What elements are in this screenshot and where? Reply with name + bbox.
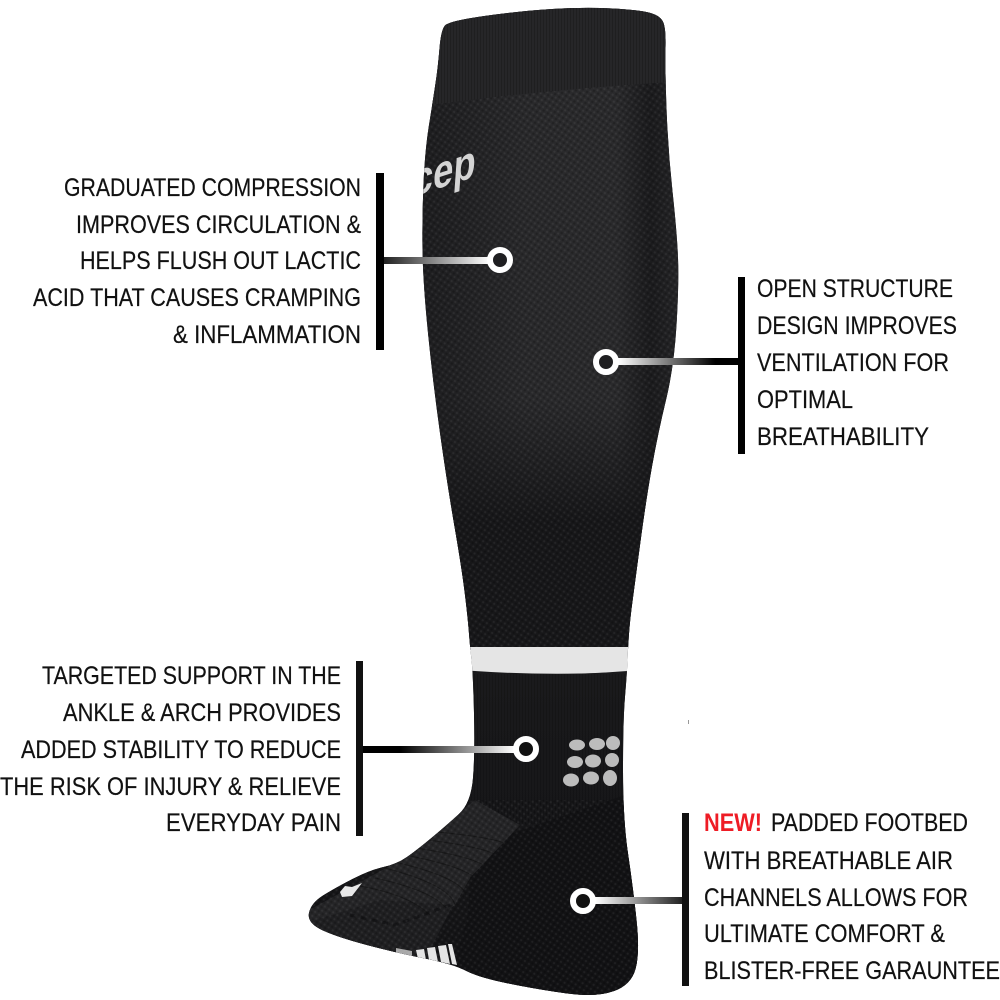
text block: DESIGN IMPROVES [757,312,957,340]
text block: THE RISK OF INJURY & RELIEVE [0,773,341,801]
text block: OPEN STRUCTURE [757,275,953,303]
toe mark [340,883,362,897]
forefoot [300,800,520,950]
text block: WITH BREATHABLE AIR [704,847,953,875]
sock photo [300,0,700,1000]
marker [490,250,510,270]
text block: & INFLAMMATION [173,321,361,349]
text block: ADDED STABILITY TO REDUCE [21,736,341,764]
text block: IMPROVES CIRCULATION & [76,211,361,239]
callout: targeted support [0,661,536,837]
dot grid logo [563,736,620,786]
marker [596,352,616,372]
sole print [396,944,457,965]
callout: graduated compression [33,173,510,350]
text block [0,662,341,837]
text block: ACID THAT CAUSES CRAMPING [33,284,361,312]
marker [516,739,536,759]
ankle [308,671,638,995]
text block: OPTIMAL [757,386,853,414]
bar [376,173,384,350]
heel panel [455,795,645,1000]
text block [704,809,1000,985]
connector [363,746,518,753]
cuff ribbing [432,8,666,105]
white band [470,647,628,674]
connector [591,897,682,904]
text block: GRADUATED COMPRESSION [64,174,361,202]
connector [384,257,492,264]
bar [356,661,363,836]
text block [757,275,957,451]
text block: TARGETED SUPPORT IN THE [42,662,341,690]
text block: BREATHABILITY [757,423,929,451]
text block [33,174,361,349]
connector [614,358,738,365]
text block: EVERYDAY PAIN [166,809,341,837]
bar [682,813,689,986]
marker [573,891,593,911]
cep logo: cep [411,134,478,207]
bar [738,277,745,454]
text block: ANKLE & ARCH PROVIDES [63,699,341,727]
stray speck [688,720,689,724]
text block: NEW! [704,809,762,837]
text block: PADDED FOOTBED [771,809,968,837]
text block: VENTILATION FOR [757,349,949,377]
text block: ULTIMATE COMFORT & [704,920,945,948]
sole seam [350,905,450,925]
text block: HELPS FLUSH OUT LACTIC [80,247,361,275]
callout: padded footbed [573,809,1000,986]
callout: open structure [596,275,957,454]
